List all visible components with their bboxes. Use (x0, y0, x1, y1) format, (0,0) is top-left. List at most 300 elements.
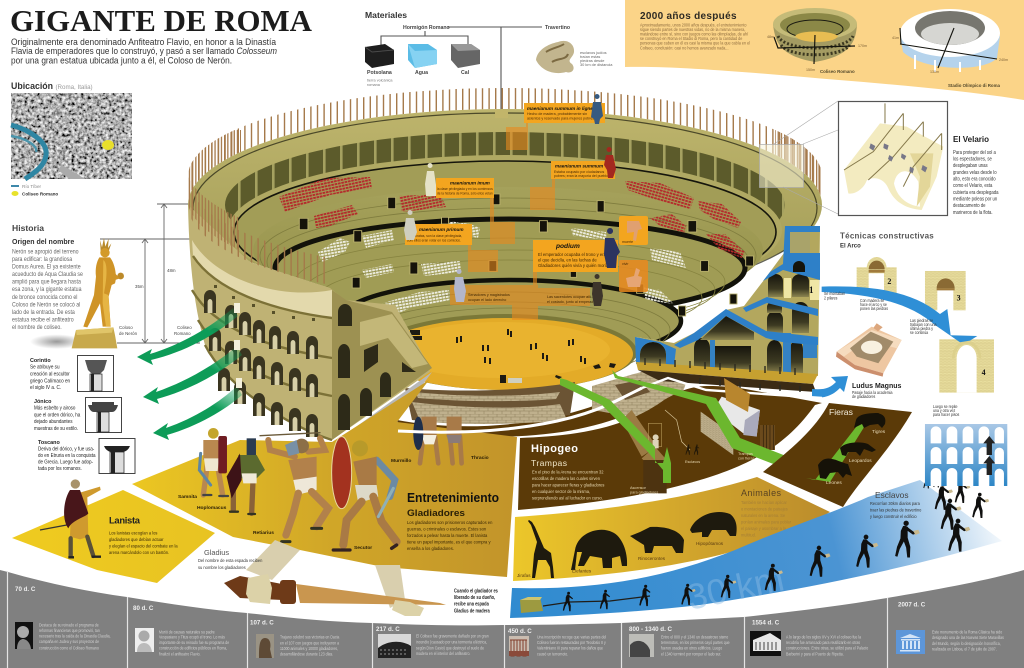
heading: el velario: El Velario (953, 135, 989, 144)
label: maenianum primum: maenianum primum (419, 227, 464, 232)
label: maenianum summum: Estaba ocupado por ciudadanos (554, 170, 604, 174)
text: 80: construcción de edificios públicos en Roma, (159, 645, 227, 651)
labels: gladiators: Hoplomacus (197, 505, 227, 511)
silhouette: leopardo (840, 442, 876, 456)
text: 217: incendio (causado por una tormenta eléctrica, (416, 639, 487, 645)
labels: gladiators: Retiarius (253, 530, 274, 536)
text: lanista: Los lanistas escogían a los (109, 530, 158, 536)
icon: thumb up (619, 260, 648, 292)
heading: historia: Historia (12, 223, 44, 233)
year labels: 217 d. C (376, 626, 400, 633)
hands (246, 574, 424, 616)
labels: hipogeo: para gladiadores (630, 490, 658, 494)
brick wall (701, 412, 733, 455)
stone block (520, 597, 543, 613)
label: maenianum summum in ligneis: maenianum summum in ligneis (527, 106, 597, 111)
arch 2 (857, 257, 897, 294)
green column arrows (137, 308, 242, 440)
orders: jónico (34, 398, 122, 432)
label: hormigón: Hormigón Romano (403, 25, 450, 31)
small block (495, 110, 508, 118)
mid tier steps (296, 238, 726, 314)
text: esclavos (870, 501, 922, 519)
silhouette: leones (818, 458, 852, 479)
dimension lines (100, 204, 226, 343)
label: maenianum summum (551, 147, 616, 179)
low steps (391, 292, 670, 364)
wall cut section (332, 290, 432, 440)
heading and text (30, 358, 70, 391)
legend: map (11, 184, 58, 196)
text: 800 (661, 634, 730, 657)
text block: 2000 años: personas que caben en él es casi la misma que la que cabía en el (640, 40, 750, 46)
dividers (8, 571, 888, 668)
heading and text: do en Etruria en la conquista (38, 453, 96, 459)
text: el velario: marineros de la flota. (953, 210, 993, 215)
text: 450: causó un terremoto. (537, 651, 568, 657)
icon: corintio capital (78, 356, 114, 392)
labels: hipogeo: Ascensor (630, 486, 647, 490)
icon: unesco (896, 630, 925, 654)
arch 3 (925, 271, 966, 311)
text: 80: Vespasiano y Titus ocupó el trono. Lo más (159, 634, 225, 640)
text: 1554: construcciones. Entre otras, se utilizó para el Palacio (786, 645, 869, 651)
text block: origen: para edificar: la grandiosa (12, 257, 73, 263)
photo: 217 (378, 634, 411, 658)
arena fighters (408, 329, 616, 383)
text: tierra volcánica: tierra volcánica (367, 78, 393, 82)
icon: potsolana cube (365, 44, 394, 68)
text: 107: 11000 animales y 10000 gladiadores, (280, 646, 338, 651)
icon: agua cube (408, 44, 437, 68)
heading and text (38, 440, 96, 472)
numbers: 4 (982, 368, 986, 377)
board (724, 378, 750, 412)
label: podium: el que decidía, en las luchas de (538, 258, 597, 262)
icon: cal cube (451, 44, 480, 68)
left wall (188, 176, 432, 460)
gladiator figures (199, 417, 462, 550)
figure: lanista (40, 479, 101, 557)
photo: 800 (629, 634, 654, 657)
arena wall (407, 314, 636, 390)
ground ledge (636, 362, 818, 384)
text: 70: construcción como el Coliseo Romano (39, 645, 100, 651)
text: 1554 (786, 634, 869, 657)
numbers: 2 (887, 277, 891, 286)
text: luego se repite: Luego se repite (933, 404, 957, 409)
text: 107: desarrollándose durante 123 días. (280, 651, 333, 657)
text: hipogeo: En el piso de la Arena se encuentran 32 (532, 469, 604, 475)
labels: animals: Rinocerontes (638, 556, 666, 561)
vomitoria (299, 194, 754, 316)
panel: 2000 años después (625, 0, 1024, 100)
heading and text: Se atribuye su (30, 364, 60, 371)
heading: gladius: Gladius (204, 548, 229, 557)
arrow: corintio (137, 308, 238, 365)
map: Roma (11, 93, 132, 179)
text: gladiadores (407, 520, 493, 551)
heading and text: muestras de su estilo. (34, 426, 78, 432)
labels: animals (517, 541, 724, 578)
text: gladiadores: forzados a pelear hasta la muerte. El lanista (407, 533, 488, 538)
text: 70 (39, 622, 111, 651)
chart: stadio miniature: 41m (892, 36, 899, 40)
técnicas constructivas (822, 232, 994, 417)
portrait: 107 (256, 634, 274, 658)
text: sacerdotes (547, 295, 597, 304)
chart: stadio miniature: 130m (930, 70, 939, 74)
heading and text: creación al escultor (30, 371, 70, 378)
text: 70: reformas financieras que promovió, tan (39, 628, 100, 633)
text: lanista: gladiadores que debían actuar (109, 537, 164, 542)
panel: fieras (763, 403, 912, 507)
text: 217: El Coliseo fue gravemente dañado por un gran (416, 633, 489, 639)
label: maenianum imum (425, 163, 494, 198)
maenianum connectors (450, 118, 590, 320)
coliseum: back poles (186, 88, 825, 210)
velario box (838, 102, 948, 216)
text: gladius (198, 558, 263, 570)
heading: materiales: Materiales (365, 10, 407, 20)
text block: origen (12, 249, 83, 331)
text: 107 (280, 634, 340, 657)
text: 800: el 1340 terminó por romper el lado sur. (661, 651, 721, 657)
text: esclavos judíos: 30 km de distancia (580, 62, 613, 67)
text: el velario: cubierta era desplegada (953, 190, 999, 195)
label: podium: podium (555, 243, 580, 250)
labels: materials: Cal (461, 70, 470, 76)
text: esclavos judíos (580, 50, 613, 67)
arch 4 (939, 339, 994, 393)
text: 70: necesario tras la caída de la Dinastía Claudia, (39, 633, 111, 639)
text: animales: También se hacían aplicar (741, 500, 787, 505)
text: cuando el gladiador (454, 588, 498, 614)
text: las piedras: se continúa (910, 330, 929, 335)
heading: hipogeo: Hipogeo (531, 443, 578, 455)
labels: fieras: Leopardos (849, 458, 872, 464)
label: maenianum imum: maenianum imum (450, 180, 490, 186)
arena (377, 318, 633, 390)
heading and text: Toscano (38, 440, 60, 446)
black band two (355, 278, 684, 346)
text: 800: fueron usadas en otros edificios. Luego (661, 645, 723, 651)
text block: origen: esa zona, y la gigante estatua (12, 287, 82, 293)
year labels: 80 d. C (133, 605, 154, 612)
text: gladiadores: Los gladiadores son prisioneros capturados en (407, 520, 493, 525)
label: maenianum summum in ligneis: asientos y reservado para mujeres pobres. (527, 116, 595, 120)
text: tierra volcánica: romana (367, 83, 381, 87)
stone foundation (405, 366, 690, 424)
text: 80: importante de su reinado fue su programa de (159, 640, 230, 645)
section backing (636, 228, 820, 376)
text: se montaban: 2 pilares (824, 295, 837, 301)
legend: map: Coliseo Romano (22, 192, 58, 196)
text: las piedras: Las piedras se (910, 318, 933, 323)
white separator arc (398, 388, 642, 432)
text: 2007: realizada en Lisboa, el 7 de julio de 2007. (932, 646, 997, 652)
building (836, 323, 902, 377)
number 1: 1 (809, 285, 814, 295)
text: las piedras: trabajan con una (910, 322, 937, 327)
text: animales: o montaciones de paisajes (741, 506, 788, 512)
timeline background (0, 570, 1024, 668)
text: 80 (159, 629, 230, 657)
light room (788, 232, 810, 254)
icon: travertine rock (536, 41, 574, 73)
labels: fieras: Leones (826, 480, 842, 486)
text: con madera: hace el arco y se (860, 302, 887, 307)
text: pasaje: Pasaje hacia la academia (852, 390, 893, 395)
label: maenianum summum: maenianum summum (555, 164, 603, 168)
coliseum: stands (188, 109, 822, 390)
heading and text: Más esbelto y airoso (34, 405, 76, 412)
ground shadow (335, 372, 432, 460)
text: cuando el gladiador: Cuando el gladiador es (454, 588, 498, 594)
text: 217: según Dion Casio) que destruyó el suelo de (416, 645, 485, 651)
panel: animales (513, 477, 830, 581)
heading: animales: Animales (741, 488, 782, 498)
text: las piedras: última piedra y (910, 326, 933, 331)
text: hipogeo: para hacer aparecer fieras y gladiadores (532, 482, 605, 488)
labels: fieras: Tigres (872, 429, 886, 435)
text: el velario: alto, esto era conocido (953, 176, 996, 182)
text block: 2000 años: matándose entre sí, sino con juegos como las olimpíadas, de ahí (640, 31, 749, 37)
labels: dimensions: Romano (174, 331, 191, 336)
text block: 2000 años: sigue siendo partes de nuestras vidas, no de la misma manera, (640, 27, 745, 32)
el velario (760, 101, 999, 216)
figure: senador (454, 269, 466, 302)
text: el velario: como el Velario, esta (953, 183, 993, 188)
text block: origen: de bronce conocida como el (12, 295, 77, 301)
heading and text: dejado abundantes (34, 419, 73, 425)
wall body (188, 205, 430, 440)
text: con madera: ponen las piedras (860, 306, 888, 311)
portrait: 80 (135, 628, 154, 652)
statue: coloso de nerón (30, 238, 124, 349)
inner cut rooms (338, 304, 416, 430)
ledge (232, 155, 780, 288)
labels: hipogeo: con fieras (738, 456, 755, 460)
icon: thumb down (619, 216, 648, 245)
text: animales: naturales en la arena. Se (741, 513, 786, 518)
labels: dimensions: Coliseo (177, 325, 192, 330)
text: 107: en el 107 con juegos que incluyeron a (280, 640, 340, 645)
year labels: 70 d. C (15, 586, 36, 593)
label: maenianum primum: sólo ellos eran votar en los comicios. (407, 238, 461, 242)
silhouette: hipopótamo (690, 512, 737, 537)
label: maenianum primum (404, 210, 472, 245)
text: cuando el gladiador: Gladius de madera (454, 608, 490, 614)
blade (296, 584, 446, 605)
text: se montaban (824, 291, 845, 301)
heading and text: tada por los romanos. (38, 466, 82, 472)
guard (280, 580, 296, 604)
text: 2007: designado una de las Nuevas Siete Maravillas (932, 635, 1004, 640)
orders: corintio (30, 356, 114, 392)
icon: jónico capital (86, 398, 122, 432)
text: 450: Valentiniano III para reparar los daños que (537, 645, 604, 651)
text block: origen: lado de la entrada. De esta (12, 310, 76, 316)
silhouette: elefante (571, 530, 627, 570)
text: 70: Destaca de su reinado el programa de (39, 622, 99, 628)
heading and text: Jónico (34, 399, 52, 405)
green arrow: gladiators (560, 378, 671, 483)
heading: ubicación: Ubicación (Roma, Italia) (11, 81, 93, 91)
silhouette: jirafa (528, 520, 554, 578)
text: esclavos judíos: traían estas (580, 54, 600, 59)
numbers: 3 (957, 294, 961, 303)
figure: sacerdote (592, 274, 603, 306)
attic (192, 240, 332, 318)
text: 70: campaña en Judea y sus proyectos de (39, 639, 100, 644)
year labels: 800 - 1340 d. C (629, 626, 673, 633)
text block: origen: el nombre de coliseo. (12, 325, 62, 331)
heading and text: Corintio (30, 358, 51, 364)
figure: secutor (332, 437, 397, 550)
text: 2007 (932, 629, 1004, 652)
text: esclavos judíos: esclavos judíos (580, 50, 607, 55)
panel: lanista (12, 479, 215, 583)
rope (543, 596, 650, 606)
arrow: arch sequence (822, 286, 977, 342)
black band one (275, 219, 745, 317)
text: animales: el paisaje y asombrar a la (741, 526, 787, 531)
handle (224, 576, 282, 600)
text: luego se repite: para hacer pisos (933, 412, 959, 417)
chart: coliseo miniature: Coliseo Romano (820, 69, 855, 74)
labels: animals: Elefantes (572, 568, 592, 574)
text: senadores: ocupan el lado derecho (468, 298, 506, 302)
text: 2007: Este monumento de la Roma Clásica ha sido (932, 629, 1003, 635)
text block: origen: amplió para que llegara hasta (12, 279, 82, 286)
text: lanista: y elegían el espacio del combate en la (109, 543, 178, 549)
text: gladius: Del nombre de esta espada reciben (198, 558, 263, 563)
text: el velario: destacamento de (953, 203, 986, 208)
labels: animals: Jirafas (517, 573, 531, 578)
intro text (11, 37, 277, 66)
intro text: Originalmente era denominado Anfiteatro Flavio, en honor a la Dinastía (11, 37, 277, 48)
labels: materials (367, 70, 470, 76)
text: gladiadores: tiene un papel importante, es el que compra y (407, 539, 491, 545)
chart: stadio miniature: 240m (999, 58, 1008, 62)
subheading: El Arco (840, 244, 861, 250)
portrait: 70 (15, 622, 33, 649)
rooms (640, 274, 809, 374)
chart: coliseo miniature: 48m (767, 35, 774, 39)
historia (12, 223, 83, 331)
chart: stadio miniature (892, 9, 1008, 88)
text: 800: Entre el 800 y el 1340 un desastroso sismo (661, 634, 729, 640)
materials block (365, 10, 613, 111)
heading and text: que el orden dórico, ha (34, 412, 80, 419)
numbers (887, 277, 986, 377)
text: 450: Una inscripción recoge que varias partes del (537, 634, 606, 640)
green arrow part (806, 422, 866, 482)
intro text: Flavia de emperadores que lo construyó, y pasó a ser llamado Colosseum (11, 46, 277, 57)
rim edge line (193, 112, 818, 266)
top rim (188, 109, 822, 268)
text block: origen: acueducto de Aqua Claudia se (12, 272, 83, 278)
labels: dimensions: 35m (135, 284, 144, 289)
tier steps (260, 198, 756, 272)
chart: coliseo miniature: 150m (806, 68, 815, 72)
arrow: ludus (812, 376, 848, 398)
text: lanista (109, 530, 178, 555)
labels: materials: Agua (415, 70, 428, 76)
slaves at rope (686, 445, 691, 455)
arrow: jónico (143, 346, 242, 404)
text: senadores: Senadores y magistrados (468, 293, 510, 297)
labels: fieras (826, 429, 886, 486)
label: maenianum summum: pobres; eran la mayoría del pueblo. (554, 174, 609, 178)
text: esclavos: Recorrían 30km diarios para (870, 501, 920, 506)
year labels: 107 d. C (250, 620, 274, 626)
text: 450: Coliseo fueron restauradas por Teodosio II y (537, 640, 606, 645)
dark arch upper (793, 261, 805, 272)
text: 217 (416, 633, 489, 656)
text: cuando el gladiador: liberado de su dueño, (454, 595, 495, 600)
zoom lines (774, 101, 838, 214)
text: las piedras (910, 318, 937, 335)
labels: hipogeo (630, 452, 755, 494)
text: el velario: desplegaban unas (953, 163, 988, 168)
heading: origen: Origen del nombre (12, 239, 74, 246)
labels: gladiators: Samnita (178, 494, 197, 500)
upper stands (256, 252, 763, 288)
front poles (188, 176, 330, 285)
text: con madera (860, 298, 888, 311)
heading: fieras: Fieras (829, 407, 853, 417)
text block: origen: Coloso de Nerón se colocó al (12, 302, 80, 309)
text: esclavos judíos: piedras desde (580, 58, 604, 63)
hipogeo brown ring (397, 375, 680, 437)
intro text: por una gran estatua ubicada junto a él, el Coloso de Nerón. (11, 56, 232, 66)
text block: 2000 años: Aproximadamente, unos 2000 años después, el entretenimiento (640, 22, 747, 28)
labels: dimensions: 48m (167, 268, 176, 273)
seats: senators and plebs (279, 177, 745, 320)
ludus magnus (812, 323, 902, 399)
text block: 2000 años: se construyó en Roma el Stadio di Roma, pero la cantidad de (640, 36, 743, 41)
text: hipogeo: escotillas de madera las cuales sirven (532, 476, 600, 481)
labels: gladiators: Secutor (354, 545, 372, 551)
labels: gladiators: Thracio (471, 455, 489, 461)
green arrow: beasts (612, 370, 866, 482)
heading: Técnicas constructivas (840, 232, 934, 240)
text: hipogeo (532, 469, 605, 501)
text: con madera: Con madera se (860, 298, 884, 303)
label: podium: Gladiadores quién vivía y quién moría. (538, 263, 609, 268)
text: 217: madera en el interior del anfiteatro. (416, 651, 470, 656)
labels: dimensions (119, 268, 192, 336)
text: cuando el gladiador: recibe una espada (454, 601, 489, 607)
arches (204, 290, 216, 313)
figure: murmillo (413, 417, 438, 463)
heading: entretenimiento: Entretenimiento (407, 491, 499, 505)
heading: lanista: Lanista (109, 514, 141, 526)
text: 107: Trajano celebró sus victorias en Dacia (280, 634, 340, 640)
elevator scene (622, 397, 775, 493)
text: el velario (953, 150, 999, 215)
photo: 450 (509, 636, 529, 656)
text: el velario: mediante poleas por un (953, 196, 998, 202)
heading: esclavos: Esclavos (875, 490, 909, 500)
label: maenianum imum: de la historia de Roma, sólo ellos votan (437, 192, 493, 196)
arrow: toscano (153, 386, 242, 440)
text: esclavos: traer las piedras de travertino (870, 507, 922, 513)
label: podium (533, 228, 620, 272)
labels: hipogeo: Trampas (738, 452, 753, 456)
